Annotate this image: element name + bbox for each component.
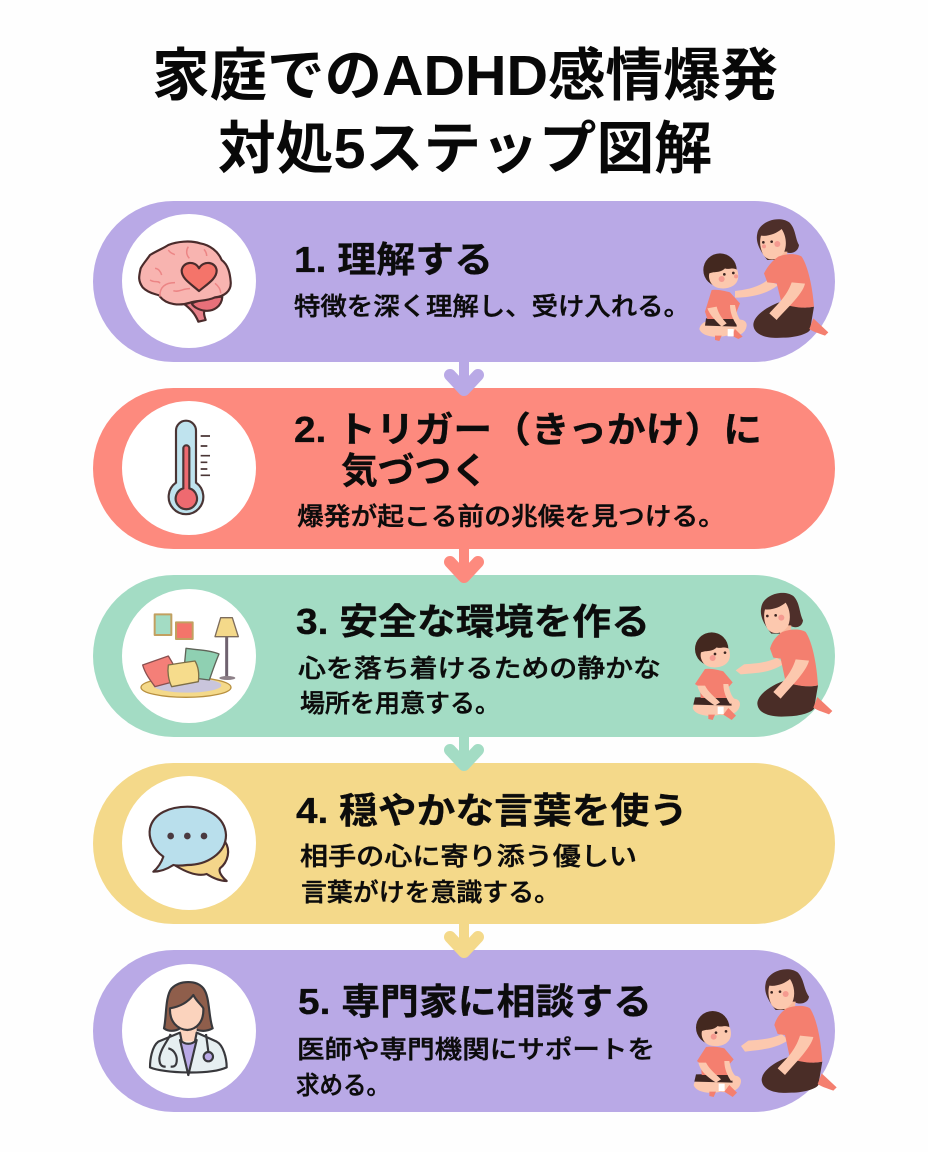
text: step 4 description: [300, 843, 637, 907]
illustration: mother and child, step 3: [693, 593, 832, 720]
heading: step 3: 3. 安全な環境を作る: [296, 601, 650, 642]
arrow: step 4 to step 5: [450, 920, 478, 952]
text: step 3 description: [298, 655, 661, 718]
text: step 5 description: 求める。: [296, 1072, 390, 1100]
text: step 2 description: 爆発が起こる前の兆候を見つける。: [297, 503, 725, 531]
heading: step 5: 5. 専門家に相談する: [298, 981, 652, 1022]
text: step 5 description: [296, 1036, 655, 1100]
illustration: mother and child, step 1: [699, 219, 828, 341]
heading: step 2: [294, 409, 762, 491]
text: step 5 description: 医師や専門機関にサポートを: [297, 1036, 655, 1064]
arrow: step 3 to step 4: [450, 733, 478, 765]
icon: cozy room: [141, 614, 238, 697]
title: [152, 44, 778, 181]
heading: step 2: 気づつく: [341, 450, 488, 491]
icon: speech bubbles: [150, 807, 228, 881]
text: step 3 description: 場所を用意する。: [300, 690, 500, 718]
panel: step 5 consult a professional: [93, 950, 837, 1112]
title: 家庭でのADHD感情爆発: [152, 44, 778, 108]
icon: thermometer: [169, 421, 210, 514]
panel: step 4 gentle words: [93, 763, 835, 924]
arrow: step 1 to step 2: [450, 358, 478, 390]
arrow: step 2 to step 3: [450, 545, 478, 577]
title: 対処5ステップ図解: [218, 117, 712, 181]
text: step 1 description: 特徴を深く理解し、受け入れる。: [294, 293, 690, 321]
heading: step 2: 2. トリガー（きっかけ）に: [294, 409, 762, 450]
panel: step 1 understand: [93, 201, 835, 362]
icon: brain with heart: [139, 242, 231, 322]
heading: step 4: 4. 穏やかな言葉を使う: [296, 790, 688, 831]
illustration: mother and child, step 5: [694, 969, 837, 1097]
panel: step 2 triggers: [93, 388, 835, 549]
text: step 3 description: 心を落ち着けるための静かな: [298, 655, 661, 683]
heading: step 1: 1. 理解する: [294, 239, 493, 280]
text: step 4 description: 言葉がけを意識する。: [301, 879, 560, 907]
icon: doctor: [150, 982, 227, 1075]
text: step 4 description: 相手の心に寄り添う優しい: [300, 843, 637, 871]
panel: step 3 safe environment: [93, 575, 835, 737]
